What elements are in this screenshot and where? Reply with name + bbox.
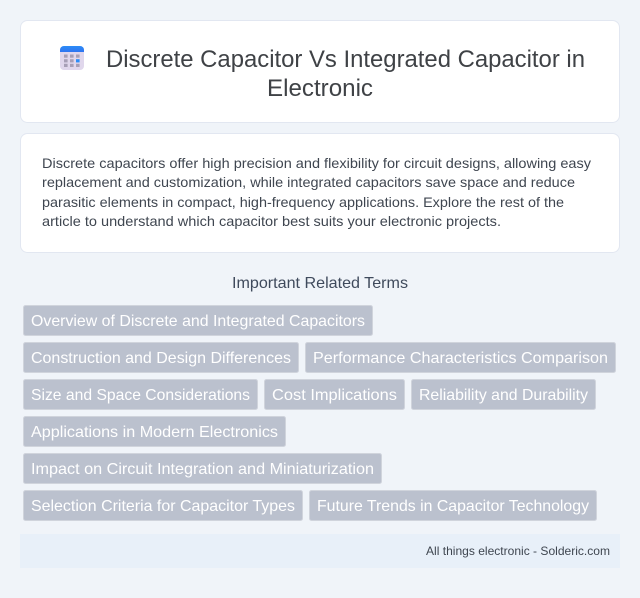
panel: title card (20, 20, 620, 122)
title (106, 46, 585, 102)
tag: overview (24, 306, 372, 336)
tag: cost: Cost Implications (272, 387, 397, 404)
tag: overview: Overview of Discrete and Integrated Capacitors (31, 313, 365, 330)
tag: future: Future Trends in Capacitor Technology (317, 498, 589, 515)
tag: selection: Selection Criteria for Capacitor Types (31, 498, 295, 515)
text block: summary (42, 155, 591, 229)
panel: summary card (20, 134, 620, 252)
text block: summary: parasitic elements in compact, high-frequency applications. Explore the rest of the (42, 194, 564, 210)
text block: summary: article to understand which capacitor best suits your electronic projects. (42, 213, 501, 229)
tag: performance: Performance Characteristics Comparison (313, 350, 608, 367)
tag: reliability: Reliability and Durability (419, 387, 588, 404)
tag: impact (24, 454, 382, 484)
tag: future (310, 490, 596, 520)
icon: calendar grid (60, 46, 84, 70)
tag: size: Size and Space Considerations (31, 387, 250, 404)
tag: reliability (412, 380, 596, 410)
tag: construction: Construction and Design Differences (31, 350, 291, 367)
tag: construction (24, 342, 298, 372)
heading: related terms: Important Related Terms (232, 275, 408, 292)
title: Discrete Capacitor Vs Integrated Capacitor in (106, 46, 585, 73)
text block: summary: replacement and customization, while integrated capacitors save space and reduce (42, 174, 575, 190)
tag: size (24, 380, 258, 410)
tag: applications (24, 416, 286, 446)
tag list (24, 306, 616, 520)
footer bar (20, 534, 620, 568)
tag: selection (24, 490, 302, 520)
text block: summary: Discrete capacitors offer high precision and flexibility for circuit designs, allowing easy (42, 155, 591, 171)
tag: applications: Applications in Modern Electronics (31, 424, 278, 441)
title: Electronic (267, 75, 373, 102)
tag: impact: Impact on Circuit Integration and Miniaturization (31, 461, 374, 478)
footer credit: All things electronic - Solderic.com (426, 544, 610, 558)
tag: performance (306, 342, 616, 372)
tag: cost (264, 380, 404, 410)
